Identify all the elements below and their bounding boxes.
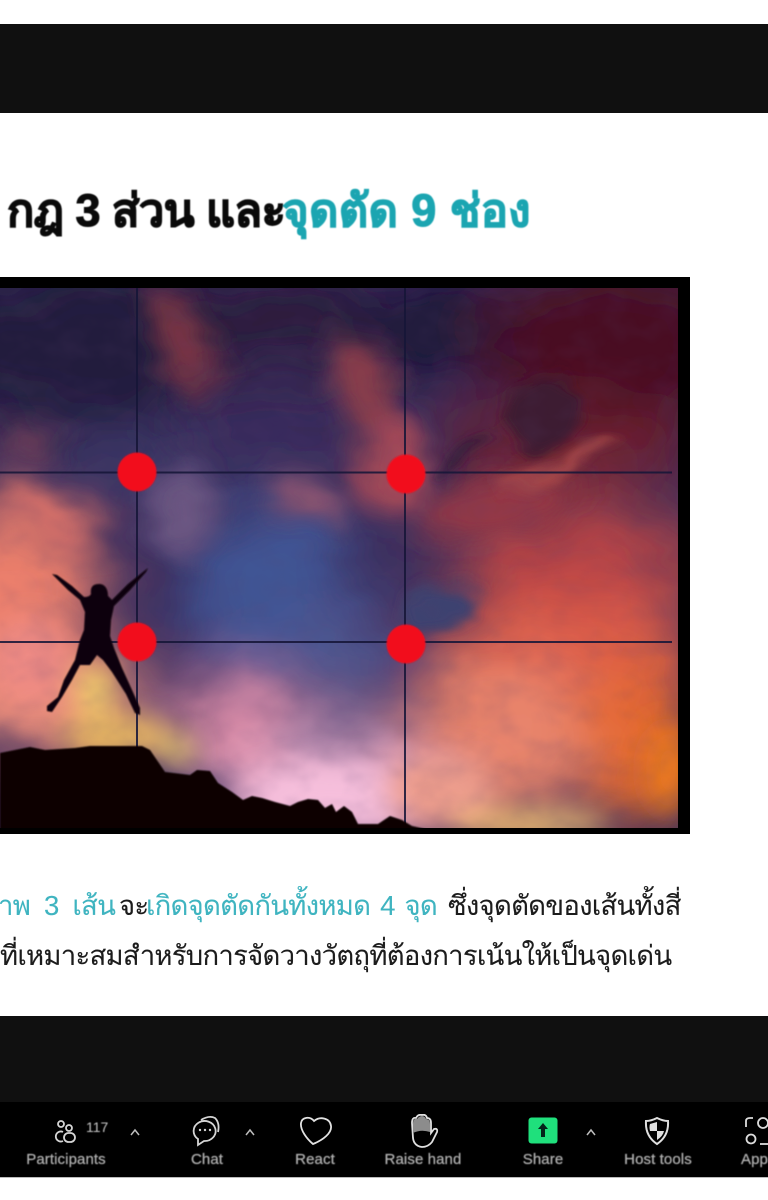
title: กฎ 3 ส่วน และจุดตัด 9 ช่อง (7, 185, 531, 236)
participants button: Participants (26, 1151, 106, 1168)
host tools button: Host tools (624, 1151, 692, 1168)
participants button: 117 (86, 1119, 108, 1135)
chat button: Chat (191, 1151, 223, 1168)
chat button (190, 1116, 224, 1168)
share button (522, 1118, 564, 1168)
caption line 1: จะ (119, 890, 148, 921)
top black bar (0, 24, 768, 113)
react button (295, 1116, 336, 1168)
participants button (26, 1119, 108, 1168)
red intersection dots (118, 452, 426, 664)
caption line 2: ที่เหมาะสมสำหรับการจัดวางวัตถุที่ต้องการเน้นให้เป็นจุดเด่น (0, 940, 671, 971)
react button: React (295, 1151, 335, 1168)
black frame (0, 277, 690, 834)
apps button, cropped at right edge (740, 1117, 768, 1168)
raise hand button (384, 1114, 462, 1168)
caption line 1: ซึ่งจุดตัดของเส้นทั้งสี่ (448, 890, 681, 921)
raise hand button: Raise hand (385, 1151, 461, 1168)
grid lines (0, 288, 672, 828)
caption line 1: าพ 3 เส้น (0, 890, 115, 921)
bottom black bar (0, 1016, 768, 1102)
window bottom edge line (0, 1177, 768, 1178)
meeting toolbar (0, 1102, 768, 1177)
caption line 1 (0, 886, 681, 922)
sunset sky (0, 288, 678, 828)
jumping person silhouette (47, 568, 148, 715)
photo: rule of thirds grid over sunset (0, 277, 690, 834)
hill silhouette (0, 746, 430, 830)
share button: Share (523, 1151, 563, 1168)
host tools button (624, 1116, 692, 1168)
caption line 1: เกิดจุดตัดกันทั้งหมด 4 จุด (146, 890, 437, 921)
caret chevrons (130, 1128, 596, 1136)
